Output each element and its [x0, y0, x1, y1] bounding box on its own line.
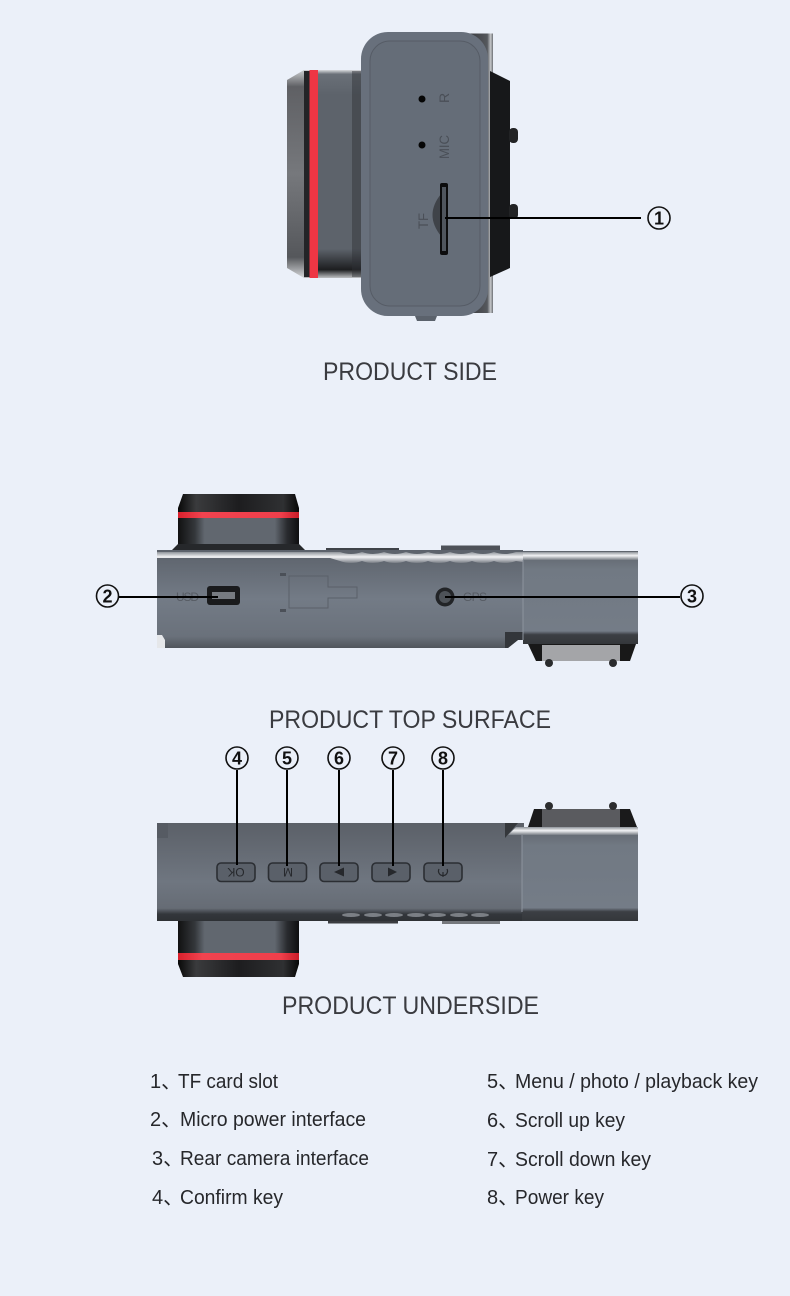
red band: [178, 512, 299, 518]
M button: [268, 863, 306, 882]
M button: M: [283, 865, 293, 879]
item 6: 6、: [487, 1110, 518, 1132]
body left section: [157, 823, 524, 921]
OK button: [217, 863, 255, 882]
MIC hole and label: [418, 142, 426, 148]
callout 5: [276, 747, 298, 866]
item 4: 4、: [152, 1187, 183, 1209]
callout 6: 6: [334, 748, 344, 768]
body right section: [523, 551, 638, 644]
USB port: [207, 586, 240, 605]
callout 2: 2: [102, 586, 113, 606]
lens barrel: [178, 921, 299, 953]
item 1: TF card slot: [178, 1071, 278, 1093]
heading: product underside: PRODUCT UNDERSIDE: [282, 992, 539, 1020]
item 8: 8、: [487, 1187, 518, 1209]
callout 8: 8: [438, 748, 448, 768]
product side view: [287, 32, 518, 321]
item 5: 5、: [487, 1071, 518, 1093]
callout 2: [96, 585, 218, 607]
callout 6: [328, 747, 350, 866]
callout 5: 5: [282, 748, 292, 768]
OK button: OK: [227, 865, 245, 879]
lens cap: [178, 494, 299, 512]
callout 4: [226, 747, 248, 865]
GPS label: GPS: [463, 590, 487, 604]
product side view: MIC: [436, 135, 452, 159]
lens barrel: [304, 70, 362, 278]
item 5: Menu / photo / playback key: [515, 1071, 758, 1093]
back silver plate: [470, 34, 493, 313]
R hole and label: [418, 96, 426, 102]
item 1: 1、: [150, 1071, 181, 1093]
product underside view: [157, 802, 638, 977]
side plate: [361, 32, 488, 316]
item 4: Confirm key: [180, 1187, 283, 1209]
mount: [528, 644, 636, 661]
lens cap: [178, 960, 299, 977]
scroll down button: [372, 863, 410, 882]
bottom clip: [415, 316, 437, 321]
mount: [528, 809, 637, 827]
item 7: Scroll down key: [515, 1149, 651, 1171]
product top surface view: [157, 494, 638, 667]
item 2: Micro power interface: [180, 1109, 366, 1131]
product side view: R: [436, 93, 452, 103]
heading: product side: PRODUCT SIDE: [323, 358, 497, 386]
body right section: [522, 827, 638, 921]
callout 7: 7: [388, 748, 398, 768]
lens tip: [287, 70, 304, 278]
mount knobs: [509, 128, 518, 219]
callout 4: 4: [232, 748, 242, 768]
highlight rail: [157, 552, 523, 563]
item 8: Power key: [515, 1187, 604, 1209]
body left section: [157, 550, 523, 648]
item 6: Scroll up key: [515, 1110, 625, 1132]
item 2: 2、: [150, 1109, 181, 1131]
TF label: TF: [415, 213, 431, 229]
red band: [178, 953, 299, 960]
callout 1: [445, 207, 670, 229]
callout 7: [382, 747, 404, 866]
TF card slot: [432, 194, 441, 236]
power button: [424, 863, 462, 882]
GPS port: [436, 588, 454, 606]
callout 3: [445, 585, 703, 607]
ribbed controls on top: [326, 548, 399, 552]
callout 1: 1: [654, 208, 664, 228]
black rear housing: [490, 71, 510, 277]
mount slot outline: [289, 576, 357, 608]
heading: product top surface: PRODUCT TOP SURFACE: [269, 706, 551, 734]
key list: [150, 1071, 758, 1209]
scroll up button: [320, 863, 358, 882]
red band: [310, 70, 318, 278]
item 7: 7、: [487, 1149, 518, 1171]
lens barrel: [178, 518, 299, 545]
item 3: Rear camera interface: [180, 1148, 369, 1170]
ribbed buttons on the lower edge: [342, 913, 489, 917]
callout 8: [432, 747, 454, 866]
USB label: USD: [176, 590, 199, 604]
item 3: 3、: [152, 1148, 183, 1170]
notch: [505, 823, 518, 838]
callout 3: 3: [687, 586, 697, 606]
